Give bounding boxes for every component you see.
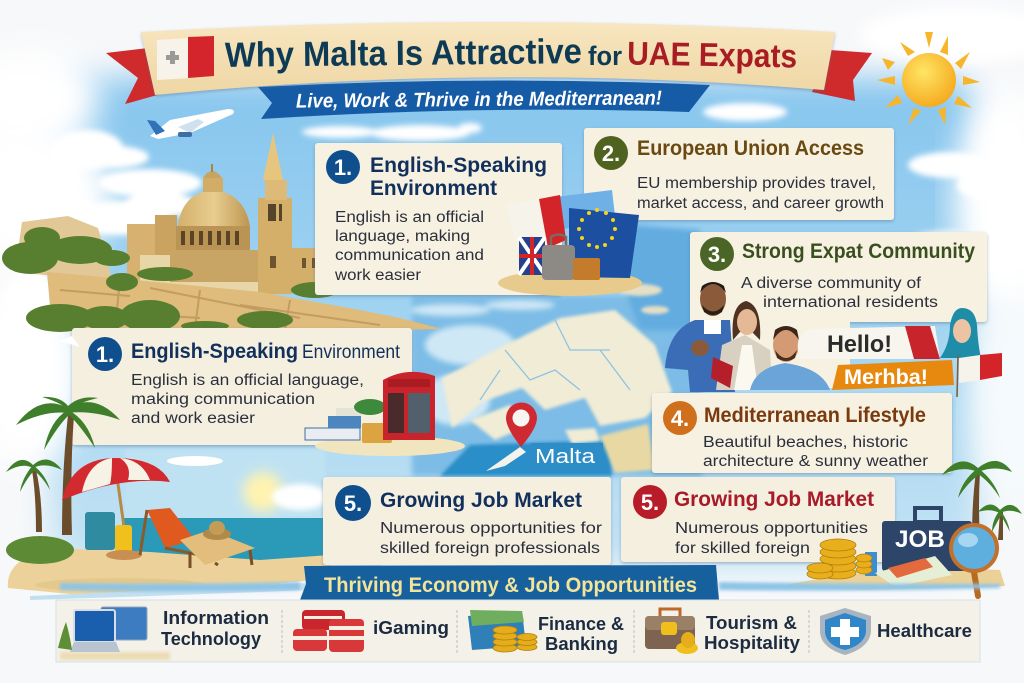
bell tower [258, 198, 292, 294]
clouds [0, 103, 1024, 506]
sector: Finance & Banking: Banking [545, 634, 618, 654]
Merhba banner [832, 360, 954, 390]
card 2: European Union Access: market access, and career growth [637, 195, 884, 212]
card 3: Strong Expat Community: Strong Expat Community [742, 240, 975, 263]
card 5: Growing Job Market (red): Numerous opportunities [675, 520, 868, 537]
job briefcase, coins, magnifier: JOB [895, 526, 945, 553]
sector: Information Technology [58, 607, 269, 652]
card 1 top: English-Speaking Environment: 1. [334, 155, 352, 180]
card 1 top: English-Speaking Environment: English is an official [335, 209, 484, 226]
sector: Tourism & Hospitality: Hospitality [704, 633, 800, 653]
card 5: Growing Job Market (blue) [323, 477, 611, 565]
bearded man [750, 363, 830, 390]
card 4: Mediterranean Lifestyle: 4. [671, 406, 689, 431]
card 5: Growing Job Market (red): for skilled foreign [675, 540, 810, 557]
sky and sunset [125, 450, 325, 520]
woman [716, 335, 772, 390]
sector: Tourism & Hospitality [645, 609, 800, 654]
card 5: Growing Job Market (red) [621, 477, 895, 562]
card 2: European Union Access [584, 128, 894, 220]
expat community people [665, 282, 1002, 397]
small Malta flag [957, 355, 958, 397]
card 5: Growing Job Market (blue): 5. [344, 491, 362, 516]
card 1 lower: English-Speaking Environment [60, 328, 412, 445]
card 4: Mediterranean Lifestyle: Mediterranean Lifestyle [704, 404, 926, 427]
palms right [942, 461, 1022, 540]
ribbon: Thriving Economy & Job Opportunities: Thriving Economy & Job Opportunities [324, 574, 697, 597]
woman in hijab [940, 308, 981, 358]
sector: Tourism & Hospitality: Tourism & [706, 613, 797, 633]
card 1 lower: English-Speaking Environment: making communication [131, 391, 315, 408]
subtitle ribbon: Live, Work & Thrive in the Mediterranean! [296, 87, 662, 113]
title text: Why Malta Is Attractive [225, 32, 582, 75]
sector: iGaming [293, 610, 449, 652]
card 1 lower: English-Speaking Environment: English-Speaking [131, 340, 298, 363]
dome [176, 226, 250, 258]
job briefcase, coins, magnifier [780, 508, 1005, 596]
title banner [141, 22, 835, 95]
card 1 top: English-Speaking Environment: language, making [335, 228, 470, 245]
red telephone box and books [305, 372, 465, 456]
card 3: Strong Expat Community: 3. [708, 242, 726, 267]
sector: Healthcare [820, 608, 972, 655]
man in blue [665, 320, 735, 392]
sector: Finance & Banking [468, 610, 624, 654]
card 5: Growing Job Market (blue): skilled foreign professionals [380, 540, 600, 557]
stone wall [47, 272, 442, 332]
title ribbon tails [106, 48, 872, 104]
title banner: for [588, 41, 622, 71]
ribbon: Thriving Economy & Job Opportunities [60, 565, 1000, 600]
blue bag and drink [85, 512, 115, 550]
sector: Information Technology: Technology [161, 629, 261, 649]
card 2: European Union Access: EU membership provides travel, [637, 175, 876, 192]
title banner: UAE Expats [627, 35, 798, 75]
airplane [147, 109, 234, 139]
card 5: Growing Job Market (blue): Growing Job Market [380, 489, 582, 512]
sector: Finance & Banking: Finance & [538, 614, 624, 634]
expat community people: Hello! [827, 331, 892, 358]
Malta map pin [486, 402, 537, 471]
Malta label: Malta [535, 446, 596, 468]
card 1 top: English-Speaking Environment: work easier [334, 267, 421, 284]
card 2: European Union Access: 2. [602, 141, 620, 166]
deck chair [147, 508, 195, 548]
Valletta skyline [2, 133, 442, 332]
card 1 top: English-Speaking Environment: English-Speaking [370, 154, 547, 177]
card 3: Strong Expat Community: international residents [763, 294, 938, 311]
card 4: Mediterranean Lifestyle: architecture & sunny weather [703, 453, 928, 470]
subtitle ribbon [258, 80, 710, 119]
card 5: Growing Job Market (blue): Numerous opportunities for [380, 520, 602, 537]
Malta flag [157, 36, 214, 80]
flags and luggage illustration [498, 190, 642, 296]
sector: Healthcare: Healthcare [877, 621, 972, 641]
lounger and hat [180, 530, 255, 565]
map: Mediterranean sea and land [410, 222, 702, 476]
speech bubble Hello [798, 326, 940, 359]
card 1 lower: English-Speaking Environment: and work easier [131, 410, 255, 427]
beach scene [6, 397, 330, 600]
umbrella [116, 470, 128, 555]
card 5: Growing Job Market (red): 5. [641, 490, 659, 515]
greenery [2, 227, 339, 332]
Malta label [531, 443, 603, 470]
card 1 top: English-Speaking Environment [315, 143, 562, 295]
palms [62, 415, 74, 535]
expat community people: Merhba! [844, 366, 928, 389]
card 1 lower: English-Speaking Environment: 1. [96, 342, 114, 367]
card 1 top: English-Speaking Environment: Environment [370, 177, 497, 200]
card 5: Growing Job Market (red): Growing Job Market [674, 488, 874, 511]
sector: iGaming: iGaming [373, 618, 449, 638]
sea [122, 518, 325, 563]
card 3: Strong Expat Community [690, 232, 987, 388]
card 1 top: English-Speaking Environment: communication and [335, 247, 484, 264]
card 4: Mediterranean Lifestyle: Beautiful beaches, historic [703, 434, 908, 451]
sector bar [56, 600, 980, 662]
fort buildings [15, 216, 112, 282]
card 1 lower: English-Speaking Environment: Environment [302, 342, 401, 363]
card 1 lower: English-Speaking Environment: English is an official language, [131, 372, 364, 389]
sector: Information Technology: Information [163, 608, 269, 628]
card 3: Strong Expat Community: A diverse community of [741, 275, 922, 292]
sun [877, 32, 980, 125]
card 4: Mediterranean Lifestyle [652, 393, 952, 473]
sand [8, 548, 330, 594]
card 2: European Union Access: European Union Access [637, 137, 864, 160]
sea-coloured shoreline [30, 583, 310, 600]
